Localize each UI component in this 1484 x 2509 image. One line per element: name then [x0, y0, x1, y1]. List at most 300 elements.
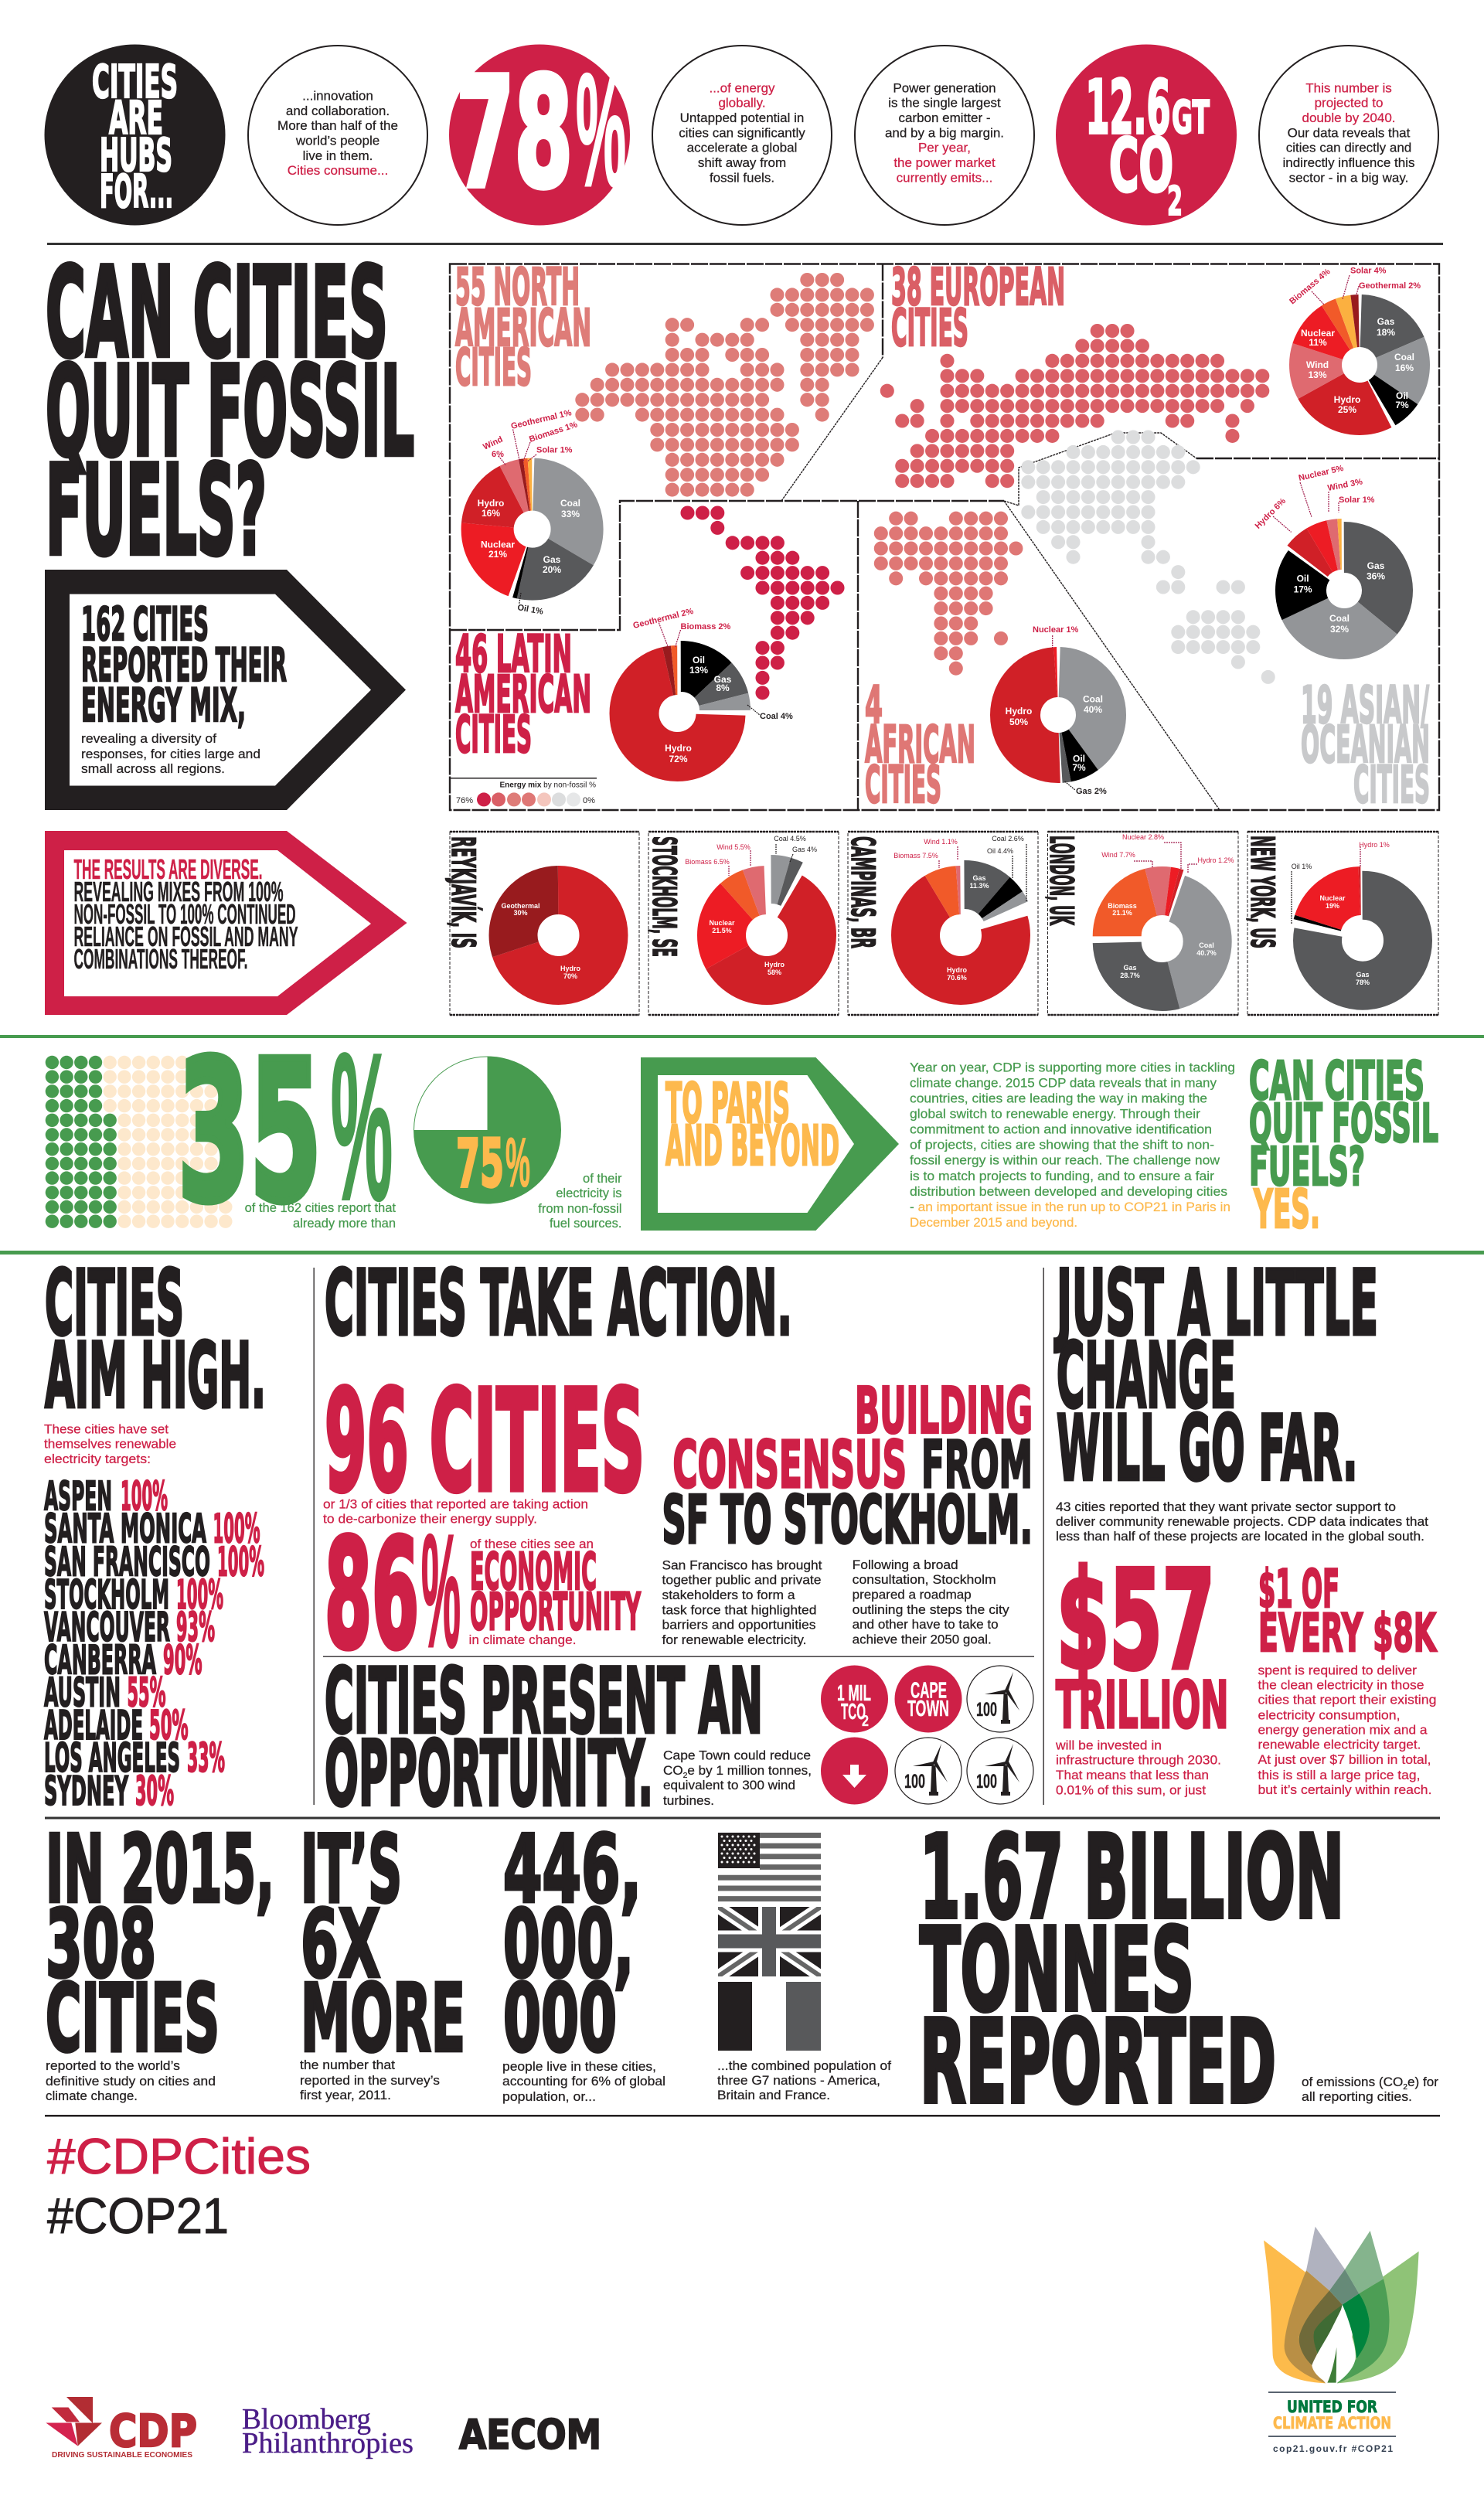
pie chart: Africa: Nuclear 1%: [1033, 625, 1079, 635]
circle text: of energy globally: shift away from: [698, 155, 786, 170]
pie chart: Latin America: 13%: [689, 665, 708, 676]
black arrow callout: 162 cities: revealing a diversity of: [81, 732, 216, 746]
text block: CDP supporting cities: [910, 1061, 1235, 1230]
red arrow callout: results are diverse: COMBINATIONS THEREOF.: [74, 943, 247, 975]
pie chart: North America: Oil 1%: [516, 603, 544, 617]
city renewable targets list: 30%: [135, 1769, 174, 1815]
pie chart: Europe: [1288, 266, 1421, 415]
stat: 1.67 billion tonnes: 2: [1403, 2083, 1407, 2092]
panel: London: Biomass: [1108, 902, 1137, 910]
text block: CDP supporting cities: - an important issue in the run up to COP21 in Paris in: [910, 1200, 1230, 1214]
stat: 96 cities: [323, 1361, 645, 1527]
circle text: innovation: More than half of the: [277, 118, 398, 133]
logo: AECOM: AECOM: [459, 2412, 601, 2459]
pie chart: North America: Solar 1%: [536, 445, 573, 454]
heading: 46 Latin American cities: 46 LATIN: [455, 625, 572, 684]
city renewable targets list: AUSTIN: [44, 1670, 121, 1716]
stat: 1 of every 8K: but it’s certainly within reach.: [1258, 1783, 1431, 1797]
text: Cape Town: equivalent to 300 wind: [663, 1779, 795, 1792]
pie chart: Latin America: Hydro: [665, 743, 692, 754]
stat: 1.67 billion tonnes: e) for: [1407, 2075, 1439, 2089]
column: cities take action: CITIES TAKE ACTION.: [325, 1251, 792, 1356]
circle text: power generation: carbon emitter -: [898, 111, 991, 125]
stat: in 2015, 308 cities: definitive study on cities and: [46, 2075, 216, 2089]
panel: New York: NEW YORK, US: [1244, 836, 1281, 948]
panel: London: Nuclear 2.8%: [1122, 833, 1164, 841]
stat: in 2015, 308 cities: climate change.: [46, 2089, 138, 2103]
stat: it's 6x more: MORE: [301, 1966, 465, 2073]
logo: United for Climate Action: cop21.gouv.fr #COP21: [1273, 2443, 1393, 2454]
red circle: 12.6 GT CO2: [1056, 45, 1237, 226]
stat: 86 percent economic opportunity: in climate change.: [468, 1633, 577, 1647]
building consensus heading: BUILDING: [855, 1374, 1033, 1449]
pie chart: Africa: Hydro: [1006, 706, 1032, 717]
red circle: 12.6 GT CO2: GT: [1172, 90, 1210, 144]
pie chart: North America: Gas: [543, 554, 561, 565]
city renewable targets list: CANBERRA: [44, 1637, 156, 1683]
heading: 55 North American cities: [455, 257, 591, 397]
panel: Campinas: 70.6%: [947, 974, 967, 982]
pie chart: North America: Wind: [482, 435, 505, 452]
circle text: projected to double: indirectly influence this: [1282, 155, 1415, 170]
pie chart: Africa: 50%: [1009, 717, 1028, 727]
text: Cape Town: Cape Town could reduce: [663, 1748, 811, 1762]
pie chart: Europe: Coal: [1394, 352, 1414, 363]
main title: [46, 240, 414, 583]
text block: CDP supporting cities: distribution between developed and developing cities: [910, 1185, 1227, 1199]
heading: can cities quit fossil fuels yes: [1249, 1050, 1438, 1241]
hashtags: #CDPCities: [47, 2128, 311, 2184]
logo: United for Climate Action: CLIMATE ACTION: [1273, 2414, 1391, 2432]
circle text: innovation: live in them.: [303, 148, 373, 163]
green band: 35 percent dot grid: already more than: [293, 1217, 396, 1231]
pie chart: Asia and Oceania: 36%: [1367, 571, 1385, 582]
circle text: power generation: currently emits...: [897, 170, 992, 185]
column: cities take action: CITIES PRESENT AN: [325, 1649, 763, 1754]
logo: CDP: CDP: [109, 2405, 197, 2457]
stat: 1.67 billion tonnes: of emissions (CO: [1302, 2075, 1400, 2089]
dots: North America: [582, 280, 867, 490]
city renewable targets list: 90%: [163, 1637, 203, 1683]
stat: 57 trillion: [1055, 1543, 1229, 1797]
pie chart: Latin America: Geothermal 2%: [632, 607, 695, 631]
icons: Cape Town equivalence circles: TCO: [841, 1700, 866, 1724]
pie chart: Latin America: Coal 4%: [760, 712, 793, 721]
text: CAN CITIES: [46, 240, 388, 385]
pie chart: 75 percent non-fossil: fuel sources.: [550, 1217, 621, 1231]
panel: Reykjavik: Geothermal: [501, 902, 540, 910]
stat: 86 percent economic opportunity: %: [421, 1502, 461, 1681]
text: Stockholm: and other have to take to: [853, 1618, 999, 1632]
red circle: 12.6 GT CO2: 2: [1167, 179, 1183, 225]
stat: 1 of every 8K: electricity consumption,: [1258, 1708, 1401, 1722]
panel: Reykjavik: Hydro: [560, 965, 580, 972]
green arrow: to Paris and beyond: [641, 1057, 899, 1231]
dots: Latin America: [688, 513, 838, 693]
panel: Stockholm: Wind 5.5%: [716, 843, 751, 851]
logo: United for Climate Action: UNITED FOR: [1287, 2398, 1377, 2416]
panel: Reykjavik: REYKJAVÍK, IS: [444, 836, 483, 948]
panel: New York: 19%: [1326, 902, 1339, 910]
panel: London: Coal: [1199, 941, 1214, 949]
circle text: power generation: [855, 46, 1034, 225]
heading: cities present an opportunity: OPPORTUNITY.: [325, 1722, 653, 1826]
text block: CDP supporting cities: climate change. 2015 CDP data reveals that in many: [910, 1076, 1217, 1090]
pie chart: Asia and Oceania: Solar 1%: [1339, 495, 1375, 505]
black circle headline: ARE: [109, 91, 163, 145]
pie chart: North America: Nuclear: [481, 540, 515, 550]
panel: Stockholm: Coal 4.5%: [774, 835, 806, 843]
black arrow callout: 162 cities: 162 CITIES: [81, 597, 209, 652]
text block: CDP supporting cities: December 2015 and beyond.: [910, 1216, 1077, 1230]
legend: energy mix by non-fossil: 76%: [456, 796, 473, 805]
text block: CDP supporting cities: Year on year, CDP is supporting more cities in tackling: [910, 1061, 1235, 1075]
stat: 446,000,000: [502, 1816, 665, 2104]
text: QUIT FOSSIL: [46, 339, 414, 484]
panel: regional world map: AFRICAN: [865, 715, 975, 774]
red arrow callout: results are diverse: [45, 831, 407, 1015]
column: just a little change: less than half of these projects are located in the global south.: [1056, 1530, 1424, 1544]
column: cities aim high: CITIES: [45, 1251, 184, 1356]
circle text: of energy globally: Untapped potential in: [680, 111, 804, 125]
text: San Francisco: [662, 1558, 822, 1647]
stat: 1 of every 8K: [1258, 1559, 1437, 1797]
pie chart: Africa: 7%: [1072, 762, 1086, 773]
circle text: power generation: the power market: [893, 155, 996, 170]
city renewable targets list: VANCOUVER: [44, 1605, 170, 1651]
column: cities aim high: [44, 1251, 266, 1815]
pie chart: Asia and Oceania: Nuclear 5%: [1298, 464, 1345, 483]
pie chart: Europe: 25%: [1338, 404, 1356, 415]
icons: Cape Town equivalence circles: 1 MIL: [837, 1681, 871, 1706]
text: AIM HIGH.: [45, 1324, 266, 1428]
icon: France flag: [718, 1982, 821, 2051]
panel: London: 28.7%: [1120, 972, 1140, 979]
stat: in 2015, 308 cities: reported to the world’s: [46, 2059, 180, 2073]
icon: US flag: [718, 1833, 821, 1899]
panel: London: 40.7%: [1196, 949, 1217, 957]
column: cities take action: [323, 1251, 1034, 1826]
panel: Reykjavik: 30%: [513, 909, 528, 917]
black arrow callout: 162 cities: ENERGY MIX,: [81, 679, 246, 733]
stat: 446,000,000: people live in these cities,: [502, 2060, 656, 2074]
stat: 96 cities: to de-carbonize their energy supply.: [323, 1513, 537, 1527]
icons: Cape Town equivalence circles: 100: [904, 1771, 925, 1792]
stat: in 2015, 308 cities: IN 2015,: [46, 1816, 274, 1924]
pie chart: Africa: Coal: [1083, 694, 1103, 705]
pie chart: Africa: Gas 2%: [1076, 787, 1107, 796]
column: cities aim high: themselves renewable: [44, 1438, 176, 1452]
stat: 446,000,000: 000: [503, 1966, 617, 2073]
black circle headline: FOR...: [100, 165, 173, 218]
icons: Cape Town equivalence circles: [821, 1665, 1033, 1804]
column: cities take action: 96 CITIES: [325, 1361, 645, 1523]
text block: CDP supporting cities: fossil energy is within our reach. The challenge now: [910, 1154, 1220, 1168]
panel: Stockholm: [645, 832, 839, 1015]
top row: cities are hubs for: [45, 41, 1438, 226]
heading: can cities quit fossil fuels yes: YES.: [1254, 1179, 1320, 1241]
stat: 86 percent economic opportunity: 86: [325, 1507, 419, 1682]
stat: in 2015, 308 cities: CITIES: [46, 1966, 220, 2073]
circle text: projected to double: projected to: [1315, 96, 1383, 111]
stat: 96 cities: or 1/3 of cities that reported are taking action: [323, 1498, 588, 1512]
stat: 446,000,000: 000,: [503, 1891, 634, 1999]
stat: 57 trillion: That means that less than: [1056, 1769, 1209, 1782]
panel: Reykjavik: [444, 832, 639, 1015]
panel: Campinas: Coal 2.6%: [992, 835, 1024, 843]
black arrow callout: 162 cities: small across all regions.: [81, 762, 225, 776]
stat: in 2015, 308 cities: [46, 1816, 274, 2103]
city renewable targets list: LOS ANGELES: [44, 1735, 180, 1782]
panel: Campinas: Oil 4.4%: [987, 847, 1013, 855]
pie chart: Europe: 18%: [1377, 327, 1395, 338]
panel: Stockholm: 58%: [768, 969, 781, 976]
panel: Reykjavik: 70%: [563, 972, 577, 980]
heading: 46 Latin American cities: [455, 625, 591, 764]
circle text: power generation: Per year,: [918, 141, 971, 155]
stat: 57 trillion: infrastructure through 2030.: [1056, 1754, 1221, 1768]
icons: three flags: ...the combined population of: [717, 2059, 891, 2073]
legend: energy mix by non-fossil: 0%: [583, 796, 595, 805]
panel: London: Hydro 1.2%: [1197, 856, 1234, 864]
logo: Bloomberg Philanthropies: Philanthropies: [242, 2427, 414, 2460]
circle text: innovation: ...innovation: [302, 88, 373, 104]
stat: 86 percent economic opportunity: ECONOMIC: [470, 1542, 597, 1602]
stat: 446,000,000: 446,: [503, 1816, 642, 1924]
pie chart: Asia and Oceania: Wind 3%: [1327, 477, 1363, 493]
stat: it's 6x more: 6X: [301, 1891, 380, 1999]
text block: CDP supporting cities: of projects, cities are showing that the shift to non-: [910, 1139, 1214, 1152]
panel: London: Wind 7.7%: [1101, 851, 1135, 859]
stat: it's 6x more: [300, 1816, 465, 2102]
pie chart: Europe: 11%: [1309, 337, 1327, 348]
stat: it's 6x more: the number that: [300, 2058, 395, 2072]
city renewable targets list: 55%: [127, 1670, 165, 1716]
map borders: [450, 264, 1439, 810]
stat: 1.67 billion tonnes: TONNES: [920, 1904, 1194, 2037]
pie chart: 75 percent non-fossil: %: [505, 1125, 530, 1202]
pie chart: Africa: 40%: [1084, 704, 1102, 715]
pie chart: Europe: Wind: [1306, 359, 1329, 370]
text: San Francisco: task force that highlighted: [662, 1603, 816, 1617]
panel: Campinas: Biomass 7.5%: [893, 852, 938, 860]
green band: 35 percent dot grid: [52, 1011, 396, 1244]
pie chart: Europe: 13%: [1308, 369, 1327, 380]
stat: 57 trillion: $57: [1057, 1543, 1215, 1700]
red arrow callout: results are diverse: NON-FOSSIL TO 100% CONTINUED: [74, 898, 295, 930]
panel: regional world map: AMERICAN: [455, 298, 591, 358]
text: San Francisco: San Francisco has brought: [662, 1558, 822, 1572]
red arrow callout: results are diverse: THE RESULTS ARE DIVERSE.: [74, 853, 263, 885]
pie chart: Europe: Oil: [1396, 390, 1408, 401]
heading: 46 Latin American cities: CITIES: [455, 705, 532, 764]
pie chart: 75 percent non-fossil: 75: [456, 1125, 504, 1203]
column: cities take action: OPPORTUNITY: [470, 1582, 641, 1642]
circle text: innovation: Cities consume...: [288, 163, 388, 178]
pie chart: Asia and Oceania: 17%: [1294, 584, 1312, 594]
main title: FUELS?: [46, 438, 267, 583]
pie chart: 75 percent non-fossil: electricity is: [556, 1186, 621, 1200]
stat: 57 trillion: will be invested in: [1055, 1739, 1162, 1753]
heading: 38 European cities: CITIES: [891, 298, 968, 358]
pie chart: Europe: Nuclear: [1301, 328, 1335, 339]
circle text: projected to double: This number is: [1305, 80, 1392, 95]
text: Stockholm: achieve their 2050 goal.: [853, 1632, 992, 1646]
column: just a little change: CHANGE: [1057, 1324, 1236, 1428]
panel: New York: Nuclear: [1319, 894, 1346, 902]
text: San Francisco: together public and private: [662, 1574, 821, 1588]
pie chart: Asia and Oceania: Gas: [1367, 560, 1385, 571]
circle text: power generation: and by a big margin.: [885, 125, 1004, 140]
text block: CDP supporting cities: countries, cities are leading the way in making the: [910, 1092, 1207, 1106]
panel: Stockholm: Gas 4%: [792, 846, 817, 853]
pie chart: Latin America: [632, 607, 793, 764]
hashtags: [47, 2128, 311, 2244]
pie chart: Africa: Oil: [1073, 754, 1085, 764]
logo: United for Climate Action: [1264, 2227, 1419, 2454]
stat: 86 percent economic opportunity: of these cities see an: [470, 1537, 594, 1551]
column: cities aim high: These cities have set: [44, 1422, 168, 1436]
pie chart: North America: Hydro: [478, 498, 504, 509]
black circle headline: HUBS: [100, 128, 172, 182]
stat: 446,000,000: population, or...: [502, 2090, 596, 2104]
panel: Campinas: Gas: [972, 874, 986, 882]
green arrow: to Paris and beyond: AND BEYOND: [665, 1114, 839, 1178]
panel: Campinas: [844, 832, 1038, 1015]
panel: regional world map: [450, 257, 1439, 815]
city renewable targets list: 100%: [121, 1473, 168, 1520]
panel: regional world map: 55 NORTH: [455, 257, 580, 317]
city renewable targets list: SYDNEY: [44, 1769, 129, 1815]
pie chart: North America: 20%: [543, 564, 561, 575]
hashtags: #COP21: [47, 2187, 229, 2244]
pie chart: Europe: Gas: [1377, 316, 1395, 327]
building consensus heading: FROM: [921, 1427, 1033, 1503]
red circle: 12.6 GT CO2: CO: [1109, 124, 1173, 209]
city renewable targets list: [44, 1473, 264, 1815]
dots: Africa: [881, 519, 1016, 669]
panel: New York: [1244, 832, 1438, 1015]
circle text: projected to double: cities can directly and: [1286, 141, 1411, 155]
panel: London: 21.1%: [1112, 909, 1132, 917]
logo: CDP: DRIVING SUSTAINABLE ECONOMIES: [52, 2450, 192, 2460]
circle text: of energy globally: accelerate a global: [687, 141, 797, 155]
pie chart: 75 percent non-fossil: of their: [583, 1172, 622, 1186]
text block: CDP supporting cities: global switch to renewable energy. Through their: [910, 1108, 1201, 1122]
text: Stockholm: Following a broad: [853, 1558, 958, 1572]
city renewable targets list: 93%: [176, 1605, 215, 1651]
circle text: of energy globally: globally.: [718, 96, 766, 111]
building consensus heading: SF TO STOCKHOLM.: [662, 1482, 1033, 1559]
dots: Asia and Oceania: [1028, 437, 1268, 677]
pie chart: Latin America: 8%: [716, 683, 730, 693]
text: San Francisco: stakeholders to form a: [662, 1588, 795, 1602]
city renewable targets list: ASPEN: [44, 1473, 112, 1520]
heading: 55 North American cities: CITIES: [455, 338, 532, 397]
circle text: innovation: world’s people: [295, 133, 380, 148]
legend: energy mix by non-fossil: Energy mix by non-fossil %: [499, 781, 596, 790]
pie chart: Asia and Oceania: 32%: [1330, 624, 1349, 635]
text: %: [331, 1011, 393, 1244]
stat: it's 6x more: first year, 2011.: [300, 2089, 391, 2102]
building consensus heading: [662, 1374, 1033, 1559]
pie chart: North America: 16%: [482, 508, 500, 519]
heading: 38 European cities: [891, 257, 1065, 358]
text: Stockholm: outlining the steps the city: [853, 1603, 1009, 1617]
black circle headline: [45, 45, 226, 226]
text: Cape Town: [663, 1748, 812, 1808]
panel: New York: Oil 1%: [1292, 863, 1312, 870]
pie chart: North America: [478, 408, 580, 617]
red circle: 78 percent: 78: [456, 46, 573, 222]
circle text: of energy globally: [652, 46, 832, 225]
pie chart: Europe: Biomass 4%: [1288, 267, 1333, 306]
stat: it's 6x more: IT’S: [301, 1816, 402, 1924]
text: Stockholm: consultation, Stockholm: [853, 1573, 996, 1587]
circle text: of energy globally: cities can significantly: [679, 125, 805, 140]
red circle: 12.6 GT CO2: 12.6: [1085, 66, 1170, 151]
pie chart: Latin America: 72%: [669, 754, 688, 764]
column: just a little change: deliver community renewable projects. CDP data indicates that: [1056, 1515, 1428, 1529]
panel: regional world map: 38 EUROPEAN: [891, 257, 1065, 317]
circle text: of energy globally: fossil fuels.: [710, 170, 774, 185]
city renewable targets list: 33%: [187, 1735, 225, 1782]
pie chart: North America: 33%: [561, 509, 580, 519]
circle text: power generation: Power generation: [893, 80, 996, 95]
pie chart: North America: 21%: [488, 549, 507, 560]
circle text: power generation: is the single largest: [888, 96, 1001, 111]
city renewable targets list: STOCKHOLM: [44, 1572, 169, 1619]
heading: 19 Asian/Oceanian cities: [1301, 676, 1430, 815]
legend: energy mix by non-fossil: [450, 778, 597, 806]
logo: Bloomberg Philanthropies: [242, 2403, 414, 2460]
column: just a little change: 43 cities reported that they want private sector support to: [1056, 1500, 1396, 1514]
stat: 1 of every 8K: cities that report their existing: [1258, 1694, 1436, 1707]
pie chart: 75 percent non-fossil: [414, 1057, 622, 1231]
pie chart: Europe: 7%: [1395, 400, 1409, 410]
stat: it's 6x more: reported in the survey’s: [300, 2074, 440, 2088]
panel: Stockholm: STOCKHOLM, SE: [645, 836, 683, 957]
pie chart: North America: Biomass 1%: [528, 420, 579, 444]
icons: Cape Town equivalence circles: TOWN: [907, 1697, 949, 1721]
stat: 57 trillion: TRILLION: [1056, 1667, 1229, 1743]
panel: London: Gas: [1123, 964, 1137, 972]
icons: Cape Town equivalence circles: CAPE: [910, 1679, 947, 1704]
heading: 4 African cities: 4: [865, 676, 883, 735]
stat: 1 of every 8K: renewable electricity target.: [1258, 1738, 1421, 1752]
icons: Cape Town equivalence circles: 100: [976, 1699, 997, 1721]
icons: Cape Town equivalence circles: 100: [976, 1771, 997, 1792]
top row: cities are hubs for: %: [576, 41, 626, 220]
pie chart: Europe: Solar 4%: [1350, 266, 1387, 275]
pie chart: Latin America: Gas: [714, 674, 732, 685]
stat: 1.67 billion tonnes: [920, 1811, 1439, 2129]
column: cities aim high: electricity targets:: [44, 1452, 151, 1466]
dots: Europe: [887, 331, 1262, 481]
icon: leaves: [1264, 2227, 1419, 2383]
pie chart: North America: Geothermal 1%: [510, 408, 573, 431]
black arrow callout: 162 cities: responses, for cities large and: [81, 747, 260, 761]
pie chart: North America: Coal: [560, 498, 580, 509]
stat: in 2015, 308 cities: 308: [46, 1891, 156, 1999]
green band: 35 percent dot grid: of the 162 cities report that: [245, 1201, 396, 1215]
column: just a little change: [1054, 1251, 1437, 1797]
city renewable targets list: SANTA MONICA: [44, 1506, 206, 1553]
panel: Campinas: Hydro: [947, 966, 967, 974]
panel: New York: Hydro 1%: [1359, 841, 1390, 849]
panel: Campinas: 11.3%: [969, 882, 989, 890]
city renewable targets list: ADELAIDE: [44, 1703, 143, 1749]
